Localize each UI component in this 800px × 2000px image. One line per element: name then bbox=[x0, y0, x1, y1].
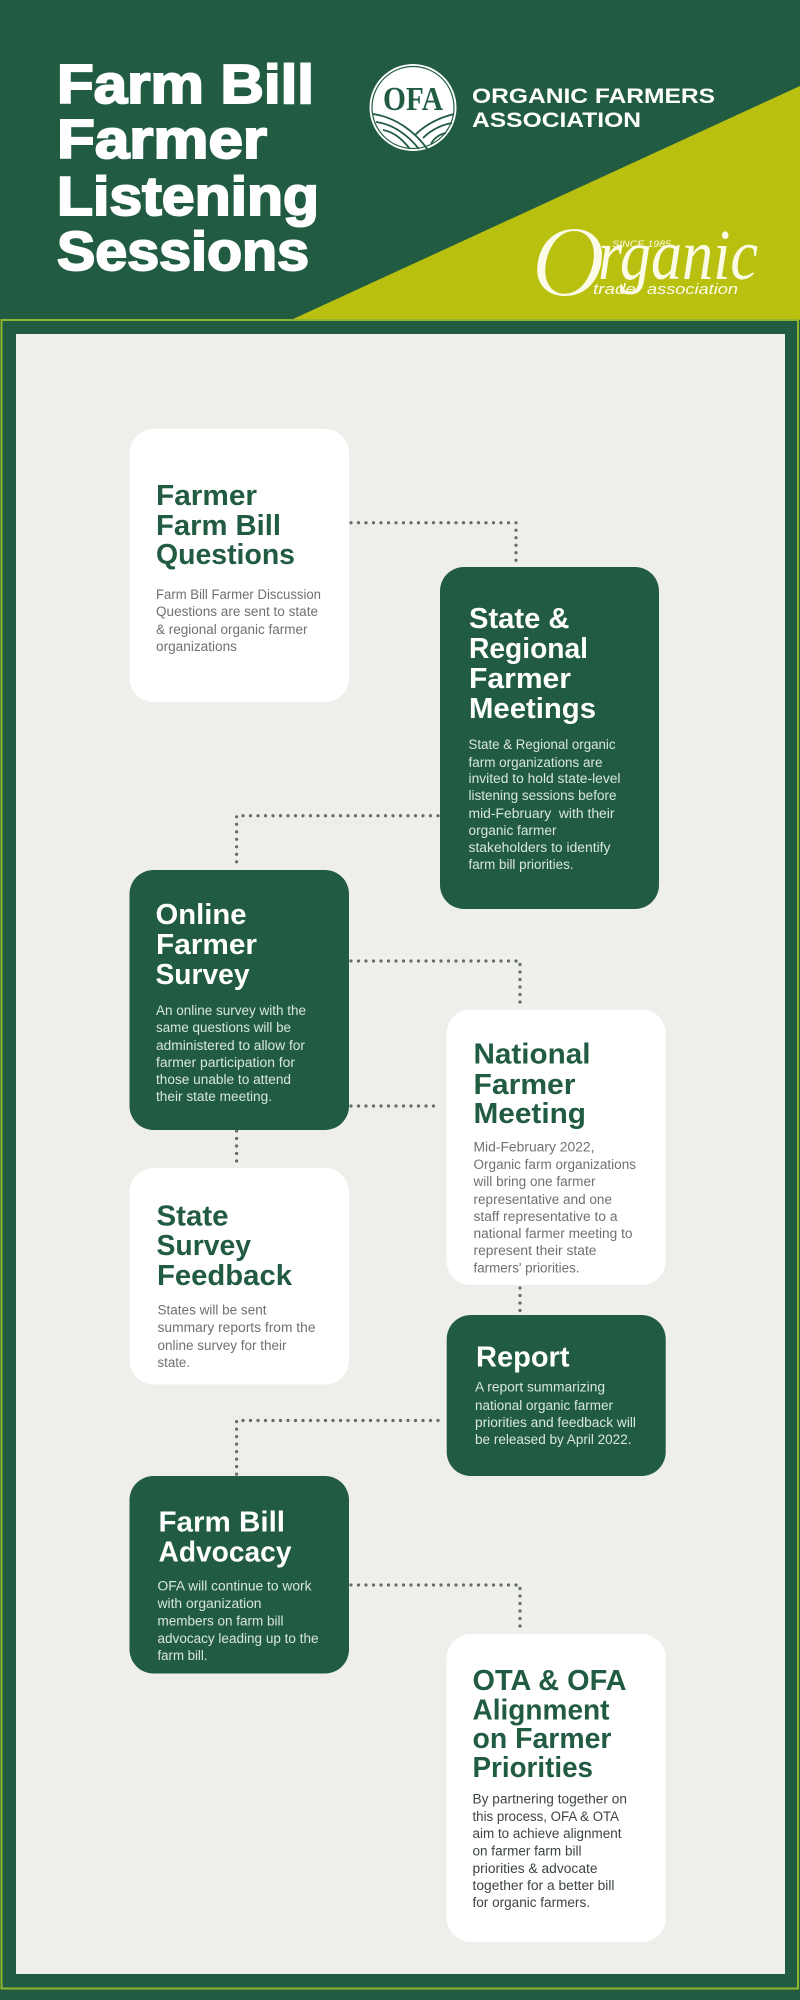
body text: those unable to attend bbox=[156, 1072, 291, 1087]
heading: Report bbox=[476, 1342, 570, 1374]
logo: Organic Trade Association: association bbox=[647, 281, 738, 298]
body text: invited to hold state-level bbox=[468, 771, 620, 786]
heading bbox=[158, 1506, 292, 1568]
body text: their state meeting. bbox=[156, 1089, 272, 1104]
heading: Priorities bbox=[472, 1752, 593, 1784]
heading bbox=[156, 899, 257, 991]
body text: farm bill priorities. bbox=[468, 857, 574, 872]
heading: Farm Bill bbox=[156, 510, 281, 542]
body text: with organization bbox=[156, 1596, 262, 1611]
arrow: connector online survey side link to national meeting bbox=[351, 1104, 440, 1108]
body text: aim to achieve alignment bbox=[472, 1826, 622, 1841]
body text: same questions will be bbox=[156, 1020, 291, 1035]
panel: National Farmer Meeting bbox=[447, 1010, 666, 1285]
body text: States will be sent bbox=[158, 1302, 267, 1318]
body text: represent their state bbox=[474, 1243, 596, 1258]
heading bbox=[472, 1665, 627, 1784]
heading bbox=[474, 1038, 590, 1130]
heading: Meeting bbox=[474, 1098, 586, 1130]
panel: State Survey Feedback bbox=[130, 1168, 349, 1384]
heading: National bbox=[474, 1038, 590, 1070]
body text: By partnering together on bbox=[472, 1792, 627, 1806]
panel: OTA & OFA Alignment on Farmer Priorities bbox=[447, 1634, 666, 1942]
heading: Advocacy bbox=[158, 1536, 292, 1568]
icon: OFA seal: OFA bbox=[383, 81, 443, 118]
body text: be released by April 2022. bbox=[475, 1432, 632, 1447]
body text: OFA will continue to work bbox=[158, 1578, 312, 1594]
title: Farm Bill bbox=[57, 53, 314, 115]
body text: administered to allow for bbox=[156, 1038, 306, 1053]
body text: Farm Bill Farmer Discussion bbox=[156, 587, 321, 602]
body text bbox=[156, 587, 321, 654]
body text: organic farmer bbox=[468, 823, 557, 838]
body text: Questions are sent to state bbox=[156, 604, 318, 619]
heading: Farmer bbox=[156, 480, 257, 512]
body text: this process, OFA & OTA bbox=[472, 1809, 619, 1824]
arrow: connector questions to state meetings bbox=[351, 523, 516, 566]
body text: organizations bbox=[156, 639, 237, 654]
heading bbox=[156, 480, 295, 571]
panel: Farm Bill Advocacy bbox=[130, 1476, 349, 1674]
body text: farm bill. bbox=[158, 1648, 208, 1663]
body text: State & Regional organic bbox=[468, 737, 616, 752]
body text: farmers' priorities. bbox=[474, 1260, 580, 1276]
body text: representative and one bbox=[474, 1192, 612, 1207]
logo: Organic Trade Association: trade bbox=[593, 281, 636, 298]
heading: Questions bbox=[156, 539, 295, 571]
logo: Organic Trade Association: O bbox=[531, 205, 605, 319]
body text: will bring one farmer bbox=[472, 1174, 596, 1189]
logo: Organic Trade Association: SINCE 1985 bbox=[612, 239, 672, 249]
arrow: connector online survey to national meeting bbox=[351, 961, 520, 1005]
body text: priorities & advocate bbox=[472, 1861, 598, 1876]
heading: Alignment bbox=[472, 1694, 610, 1726]
heading bbox=[156, 1200, 293, 1292]
panel: State & Regional Farmer Meetings bbox=[440, 567, 659, 909]
logo: Organic Trade Association bbox=[531, 205, 758, 319]
body text: A report summarizing bbox=[475, 1380, 605, 1394]
heading: Online bbox=[156, 899, 246, 931]
panel: Report bbox=[447, 1315, 666, 1476]
body text: summary reports from the bbox=[158, 1320, 316, 1335]
heading: Farmer bbox=[469, 663, 571, 695]
body text: for organic farmers. bbox=[472, 1895, 590, 1910]
heading: Feedback bbox=[157, 1260, 293, 1292]
body text: listening sessions before bbox=[468, 788, 616, 803]
body text: online survey for their bbox=[158, 1338, 287, 1353]
body text: Mid-February 2022, bbox=[474, 1140, 594, 1154]
panel: content background bbox=[16, 334, 785, 1974]
body text: advocacy leading up to the bbox=[158, 1631, 318, 1646]
body text: & regional organic farmer bbox=[156, 622, 308, 637]
title: Sessions bbox=[57, 220, 309, 282]
heading: Regional bbox=[469, 633, 588, 665]
heading: Farm Bill bbox=[158, 1506, 285, 1538]
logo: Organic Trade Association: rganic bbox=[598, 215, 758, 295]
panel: Farmer Farm Bill Questions bbox=[130, 429, 349, 702]
header lime triangle bbox=[291, 86, 800, 320]
body text: priorities and feedback will bbox=[475, 1415, 636, 1430]
body text: members on farm bill bbox=[158, 1614, 284, 1628]
title bbox=[57, 53, 319, 282]
arrow: connector state meetings to online survey bbox=[237, 816, 438, 865]
heading: OTA & OFA bbox=[472, 1665, 627, 1697]
body text bbox=[472, 1792, 627, 1910]
body text bbox=[475, 1380, 636, 1447]
heading: State & bbox=[469, 603, 570, 635]
body text bbox=[156, 1578, 318, 1663]
logo: Organic Farmers Association: ASSOCIATION bbox=[472, 109, 641, 132]
heading: Meetings bbox=[469, 693, 596, 725]
body text: national farmer meeting to bbox=[474, 1226, 632, 1241]
body text: farm organizations are bbox=[468, 755, 602, 770]
arrow: connector report to advocacy bbox=[237, 1420, 438, 1476]
body text bbox=[472, 1140, 636, 1276]
heading: Survey bbox=[156, 959, 250, 991]
heading: State bbox=[156, 1200, 228, 1232]
body text: state. bbox=[158, 1355, 190, 1370]
arrow: connector advocacy to alignment bbox=[351, 1585, 520, 1628]
heading: Survey bbox=[156, 1230, 251, 1262]
body text bbox=[158, 1302, 316, 1370]
logo: Organic Farmers Association bbox=[370, 64, 715, 151]
body text: national organic farmer bbox=[475, 1398, 613, 1413]
heading: Farmer bbox=[156, 929, 257, 961]
icon: OFA seal bbox=[370, 64, 456, 151]
arrow: connector national meeting to report bbox=[518, 1288, 522, 1315]
logo text: ORGANIC FARMERS bbox=[472, 85, 715, 108]
body text: on farmer farm bill bbox=[472, 1844, 582, 1858]
title: Farmer bbox=[57, 108, 267, 170]
body text: staff representative to a bbox=[474, 1209, 618, 1224]
body text bbox=[468, 737, 620, 872]
heading bbox=[469, 603, 596, 725]
body text: mid-February with their bbox=[468, 806, 615, 821]
body text: An online survey with the bbox=[156, 1003, 306, 1018]
body text bbox=[156, 1003, 306, 1104]
body text: stakeholders to identify bbox=[468, 840, 611, 855]
body text: farmer participation for bbox=[156, 1055, 296, 1070]
body text: together for a better bill bbox=[472, 1878, 614, 1893]
panel: Online Farmer Survey bbox=[130, 870, 349, 1130]
arrow: connector online survey to state feedback bbox=[235, 1131, 238, 1167]
heading: Farmer bbox=[474, 1069, 576, 1101]
title: Listening bbox=[57, 165, 319, 227]
heading: on Farmer bbox=[472, 1723, 612, 1755]
body text: Organic farm organizations bbox=[474, 1157, 636, 1172]
